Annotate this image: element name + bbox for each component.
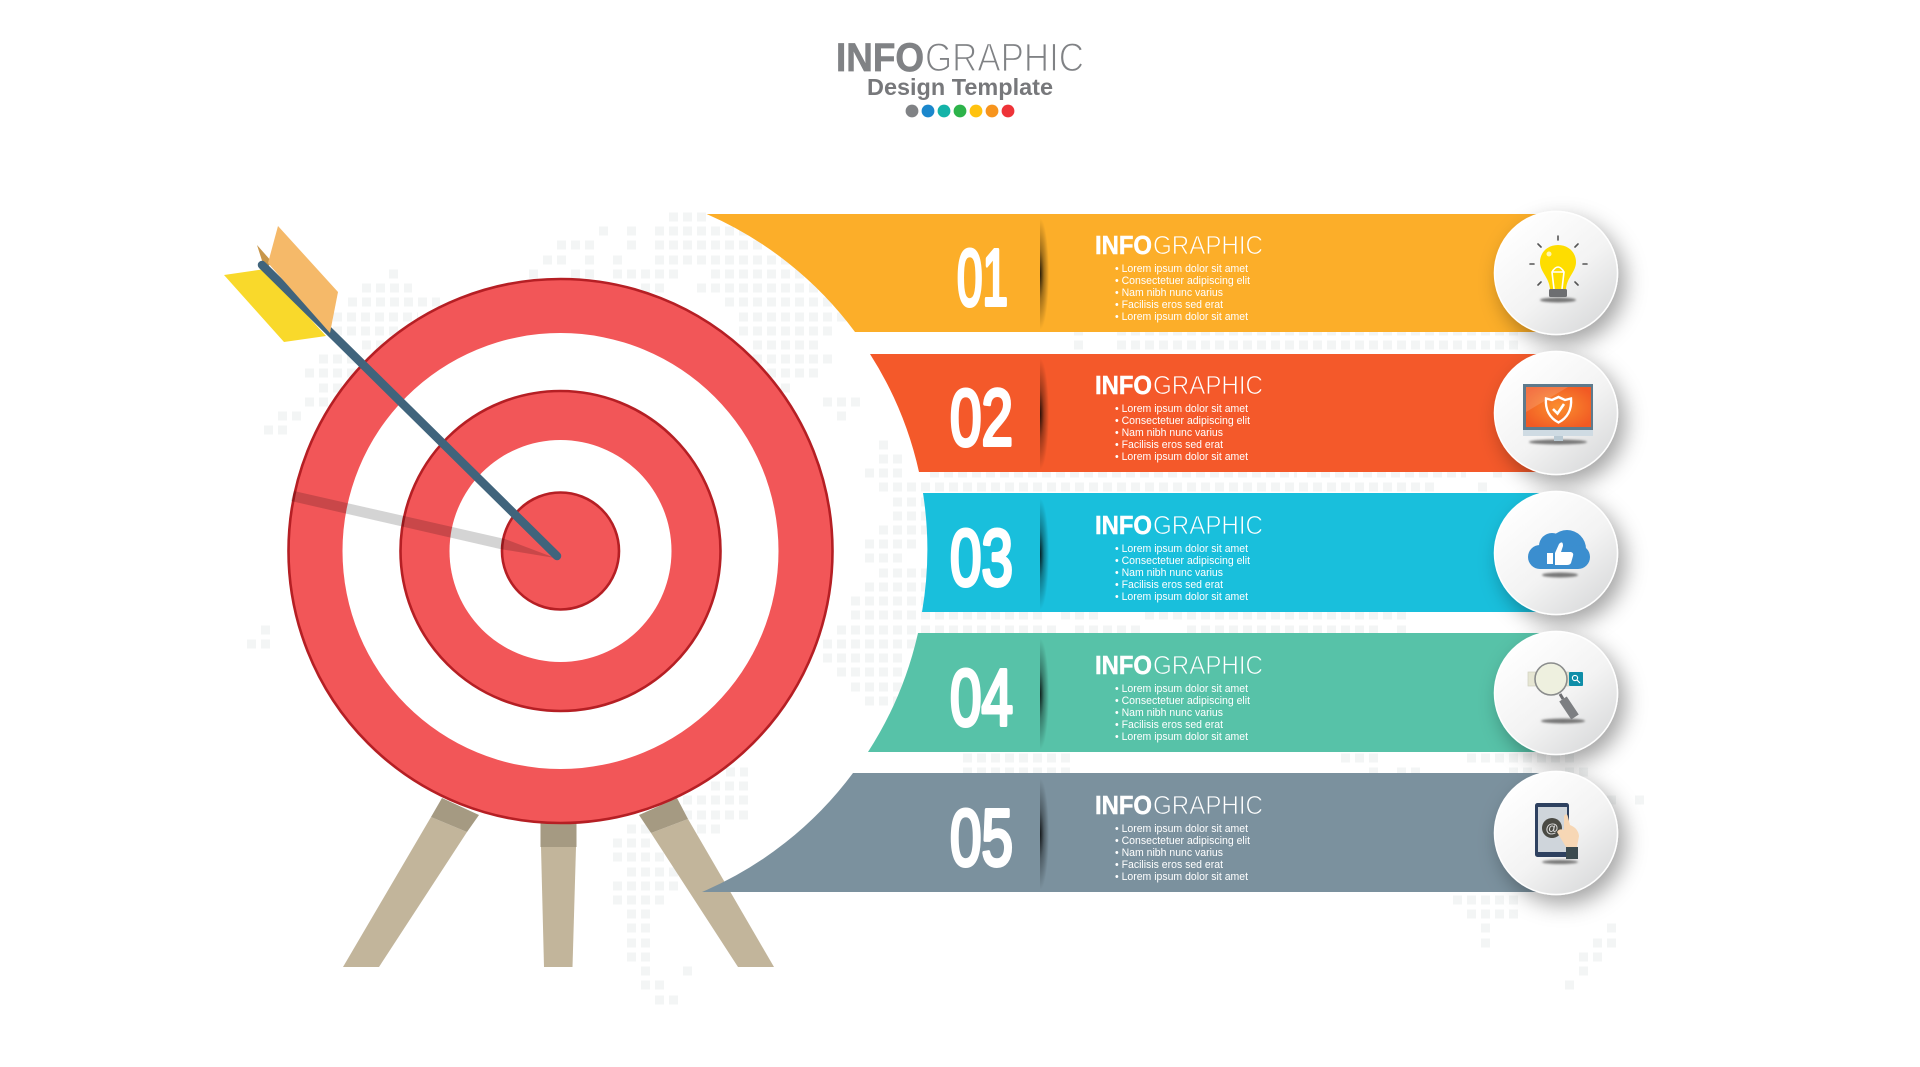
panel: band 05: • Nam nibh nunc varius	[1115, 847, 1223, 859]
panel: band 03: • Facilisis eros sed erat	[1115, 579, 1224, 591]
panel: band 03: GRAPHIC	[1153, 512, 1263, 540]
panel: band 04: INFO	[1095, 652, 1152, 680]
panel: band 05: • Consectetuer adipiscing elit	[1115, 835, 1251, 847]
panel: band 02: • Lorem ipsum dolor sit amet	[1115, 451, 1249, 463]
arrow shadow	[291, 491, 555, 558]
panel: band 03: • Lorem ipsum dolor sit amet	[1115, 591, 1249, 603]
title	[836, 36, 1084, 100]
icon: tablet with touching hand: @	[1546, 820, 1558, 836]
panel: band 01: • Lorem ipsum dolor sit amet	[1115, 311, 1249, 323]
panel: band 01: • Facilisis eros sed erat	[1115, 299, 1224, 311]
title colour dots	[906, 105, 1014, 117]
panel: band 02: GRAPHIC	[1153, 372, 1263, 400]
icon disc 01	[1494, 212, 1618, 334]
title: Design Template	[867, 74, 1053, 100]
panel: band 01: 01	[957, 233, 1008, 322]
arrow	[224, 226, 557, 556]
panel: band 05: • Lorem ipsum dolor sit amet	[1115, 823, 1249, 835]
icon disc 05	[1494, 772, 1618, 894]
panel: band 03: INFO	[1095, 512, 1152, 540]
panel: band 02: • Consectetuer adipiscing elit	[1115, 415, 1251, 427]
panel: band 04: • Consectetuer adipiscing elit	[1115, 695, 1251, 707]
panel: band 04: • Facilisis eros sed erat	[1115, 719, 1224, 731]
panel: band 01: • Lorem ipsum dolor sit amet	[1115, 263, 1249, 275]
panel: band 02	[870, 354, 1556, 472]
panel: band 01: • Consectetuer adipiscing elit	[1115, 275, 1251, 287]
icon: cloud with thumbs up	[1528, 530, 1590, 578]
panel: band 02: • Lorem ipsum dolor sit amet	[1115, 403, 1249, 415]
icon: monitor with shield	[1523, 384, 1593, 444]
panel: band 01	[707, 214, 1556, 332]
panel: band 02: • Facilisis eros sed erat	[1115, 439, 1224, 451]
panel: band 04: GRAPHIC	[1153, 652, 1263, 680]
panel: band 05: GRAPHIC	[1153, 792, 1263, 820]
panel: band 04: 04	[950, 653, 1013, 742]
target stand legs	[343, 798, 774, 967]
title: INFO	[836, 36, 924, 80]
icon: magnifier and search box	[1528, 663, 1585, 724]
panel: band 03: • Lorem ipsum dolor sit amet	[1115, 543, 1249, 555]
panel: band 04: • Nam nibh nunc varius	[1115, 707, 1223, 719]
panel: band 03	[922, 493, 1556, 612]
panel: band 03: 03	[950, 513, 1013, 602]
panel: band 01: INFO	[1095, 232, 1152, 260]
icon disc 03	[1494, 492, 1618, 614]
panel: band 04: • Lorem ipsum dolor sit amet	[1115, 683, 1249, 695]
panel: band 03: • Nam nibh nunc varius	[1115, 567, 1223, 579]
panel: band 02: 02	[950, 373, 1013, 462]
panel: band 02: • Nam nibh nunc varius	[1115, 427, 1223, 439]
panel: band 03: • Consectetuer adipiscing elit	[1115, 555, 1251, 567]
panel: band 05: • Facilisis eros sed erat	[1115, 859, 1224, 871]
title: GRAPHIC	[925, 36, 1084, 80]
background dotted world map	[247, 217, 1644, 1000]
icon: tablet with touching hand	[1535, 803, 1579, 864]
panel: band 05: INFO	[1095, 792, 1152, 820]
target	[288, 279, 832, 823]
icon disc 02	[1494, 352, 1618, 474]
panel: band 01: • Nam nibh nunc varius	[1115, 287, 1223, 299]
panel: band 04	[868, 633, 1556, 752]
panel: band 05: • Lorem ipsum dolor sit amet	[1115, 871, 1249, 883]
panel: band 02: INFO	[1095, 372, 1152, 400]
icon disc 04	[1494, 632, 1618, 754]
panel: band 04: • Lorem ipsum dolor sit amet	[1115, 731, 1249, 743]
icon: light bulb	[1530, 236, 1587, 302]
panel: band 05: 05	[950, 793, 1013, 882]
panel: band 01: GRAPHIC	[1153, 232, 1263, 260]
panel: band 05	[702, 773, 1556, 892]
